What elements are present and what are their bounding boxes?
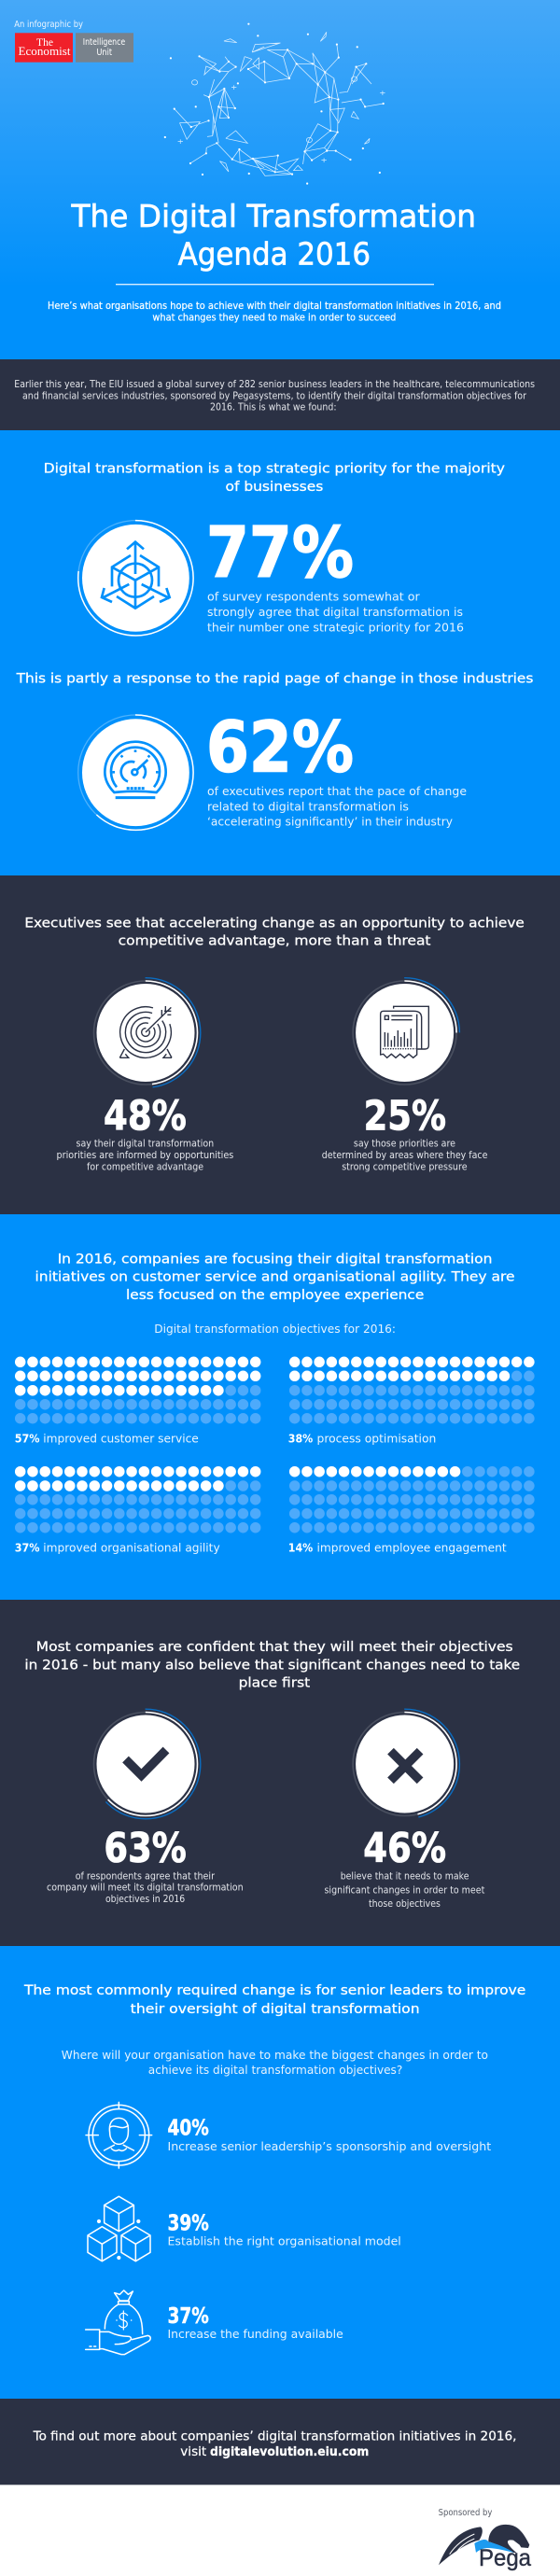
stat: 63% — [47, 1826, 244, 1905]
panel: strategic priority — [0, 430, 560, 875]
logo: The Economist Intelligence Unit — [15, 33, 133, 63]
panel: introduction — [0, 359, 560, 430]
stat: 37%: Increase the funding available — [168, 2328, 343, 2341]
heading: This is partly a response to the rapid page of change in those industries — [16, 671, 533, 686]
icon: three cubes — [88, 2196, 150, 2261]
stat: 63%: 63% — [104, 1826, 187, 1872]
panel: confidence — [0, 1600, 560, 1946]
label: 38%: process optimisation — [317, 1432, 436, 1445]
chart subtitle: Digital transformation objectives for 2016: — [154, 1323, 396, 1336]
stat: 46%: those objectives — [369, 1898, 441, 1910]
label: 57%: 57% — [15, 1432, 39, 1445]
stat: 62%: of executives report that the pace of change — [207, 785, 467, 798]
stat: 48% — [56, 1094, 233, 1172]
stat: 40%: Increase senior leadership’s sponsorship and oversight — [168, 2140, 491, 2153]
stat: 62%: 62% — [206, 707, 354, 789]
icon: target with arrow — [91, 978, 201, 1087]
survey question: achieve its digital transformation objectives? — [148, 2064, 402, 2077]
sponsor label: Sponsored by — [439, 2508, 493, 2518]
heading — [24, 916, 525, 949]
title — [71, 198, 476, 273]
subtitle — [48, 301, 501, 324]
stat: 62%: ‘accelerating significantly’ in their industry — [207, 816, 453, 829]
heading: Digital transformation is a top strategic priority for the majority — [44, 462, 506, 477]
icon: cube with arrows in ring — [78, 521, 193, 636]
panel: opportunity vs threat — [0, 875, 560, 1214]
stat: 46% — [325, 1826, 484, 1910]
icon: speedometer in ring — [78, 715, 193, 830]
stat: 62% — [206, 707, 467, 829]
stat: 77%: strongly agree that digital transformation is — [207, 606, 463, 619]
stat: 48%: priorities are informed by opportunities — [56, 1150, 233, 1161]
stat: 77% — [206, 511, 464, 634]
label: 14%: 14% — [288, 1542, 313, 1555]
stat: 77%: their number one strategic priority for 2016 — [207, 621, 464, 634]
subtitle: what changes they need to make in order to succeed — [152, 313, 396, 324]
icon: hand with money bag — [86, 2290, 150, 2355]
logo: The Economist Intelligence Unit: Intelligence — [83, 37, 125, 48]
stat: 39% — [168, 2212, 401, 2248]
stat: 46%: 46% — [363, 1826, 446, 1872]
stat: 63%: company will meet its digital transformation — [47, 1883, 244, 1894]
heading: place first — [239, 1676, 311, 1691]
illustration: digital network ring — [165, 24, 385, 184]
dot chart: 37% improved organisational agility — [21, 1472, 256, 1528]
heading: their oversight of digital transformation — [131, 2002, 420, 2017]
heading: In 2016, companies are focusing their digital transformation — [58, 1252, 492, 1267]
call to action text — [33, 2429, 516, 2459]
logo: The Economist Intelligence Unit: Economist — [19, 45, 71, 58]
call to action text: visit — [180, 2445, 206, 2459]
stat: 37%: 37% — [168, 2304, 209, 2329]
panel: call to action — [0, 2399, 560, 2485]
dot chart: 38% process optimisation — [295, 1362, 529, 1419]
credit line: An infographic by — [14, 20, 83, 30]
survey question: Where will your organisation have to make the biggest changes in order to — [62, 2049, 488, 2062]
title: The Digital Transformation — [71, 198, 476, 234]
call to action text: digitalevolution.eiu.com — [210, 2445, 369, 2459]
icon: financial report — [350, 978, 459, 1087]
stat: 40% — [168, 2117, 491, 2153]
stat: 25%: 25% — [364, 1094, 446, 1141]
panel: sponsor — [0, 2485, 560, 2576]
stat: 62%: related to digital transformation is — [207, 800, 409, 813]
stat: 40%: 40% — [168, 2117, 209, 2141]
intro text — [14, 379, 535, 413]
stat: 37% — [168, 2304, 343, 2341]
stat: 46%: believe that it needs to make — [341, 1870, 469, 1882]
logo: Pega: Pega — [479, 2545, 531, 2571]
stat: 63%: of respondents agree that their — [76, 1870, 216, 1882]
heading — [35, 1252, 515, 1303]
stat: 48%: for competitive advantage — [87, 1161, 203, 1172]
label: 37%: 37% — [15, 1542, 39, 1555]
subtitle: Here’s what organisations hope to achieve with their digital transformation initiatives in 2016, and — [48, 301, 501, 312]
icon: check mark — [91, 1709, 201, 1819]
heading: The most commonly required change is for senior leaders to improve — [23, 1983, 525, 1998]
stat: 25%: determined by areas where they face — [322, 1150, 487, 1161]
heading — [23, 1983, 525, 2017]
stat: 77%: of survey respondents somewhat or — [207, 591, 421, 604]
panel: required changes — [0, 1946, 560, 2399]
stat: 48%: say their digital transformation — [77, 1139, 214, 1150]
label: 14%: improved employee engagement — [317, 1542, 507, 1555]
icon: leader in crosshair — [86, 2102, 152, 2168]
stat: 25% — [322, 1094, 487, 1172]
stat: 63%: objectives in 2016 — [105, 1894, 185, 1905]
heading: competitive advantage, more than a threat — [119, 934, 431, 949]
dot chart: 14% improved employee engagement — [295, 1472, 529, 1528]
logo: Pega — [439, 2525, 531, 2571]
heading: Executives see that accelerating change as an opportunity to achieve — [24, 916, 525, 931]
stat: 48%: 48% — [104, 1094, 187, 1141]
panel: objectives — [0, 1214, 560, 1600]
icon: cross mark — [350, 1709, 459, 1819]
survey question — [62, 2049, 488, 2077]
call to action text: To find out more about companies’ digital transformation initiatives in 2016, — [33, 2429, 516, 2443]
heading: initiatives on customer service and organisational agility. They are — [35, 1270, 515, 1285]
dot chart: 57% improved customer service — [21, 1362, 256, 1419]
panel: header — [0, 0, 560, 359]
heading: of businesses — [226, 480, 323, 495]
heading: in 2016 - but many also believe that significant changes need to take — [24, 1658, 520, 1673]
stat: 25%: strong competitive pressure — [342, 1161, 468, 1172]
logo: The Economist Intelligence Unit: The — [36, 37, 53, 49]
heading — [44, 462, 506, 495]
stat: 46%: significant changes in order to meet — [325, 1884, 484, 1896]
label: 37%: improved organisational agility — [43, 1542, 220, 1555]
stat: 77%: 77% — [206, 511, 354, 594]
stat: 39%: Establish the right organisational model — [168, 2235, 401, 2248]
logo: The Economist Intelligence Unit: Unit — [97, 48, 112, 58]
label: 57%: improved customer service — [43, 1432, 199, 1445]
stat: 25%: say those priorities are — [354, 1139, 455, 1150]
heading: Most companies are confident that they will meet their objectives — [36, 1640, 513, 1655]
heading: less focused on the employee experience — [126, 1288, 424, 1303]
intro text: 2016. This is what we found: — [210, 402, 336, 413]
stat: 39%: 39% — [168, 2212, 209, 2236]
label: 38%: 38% — [288, 1432, 313, 1445]
title: Agenda 2016 — [178, 236, 371, 273]
heading — [24, 1640, 520, 1691]
